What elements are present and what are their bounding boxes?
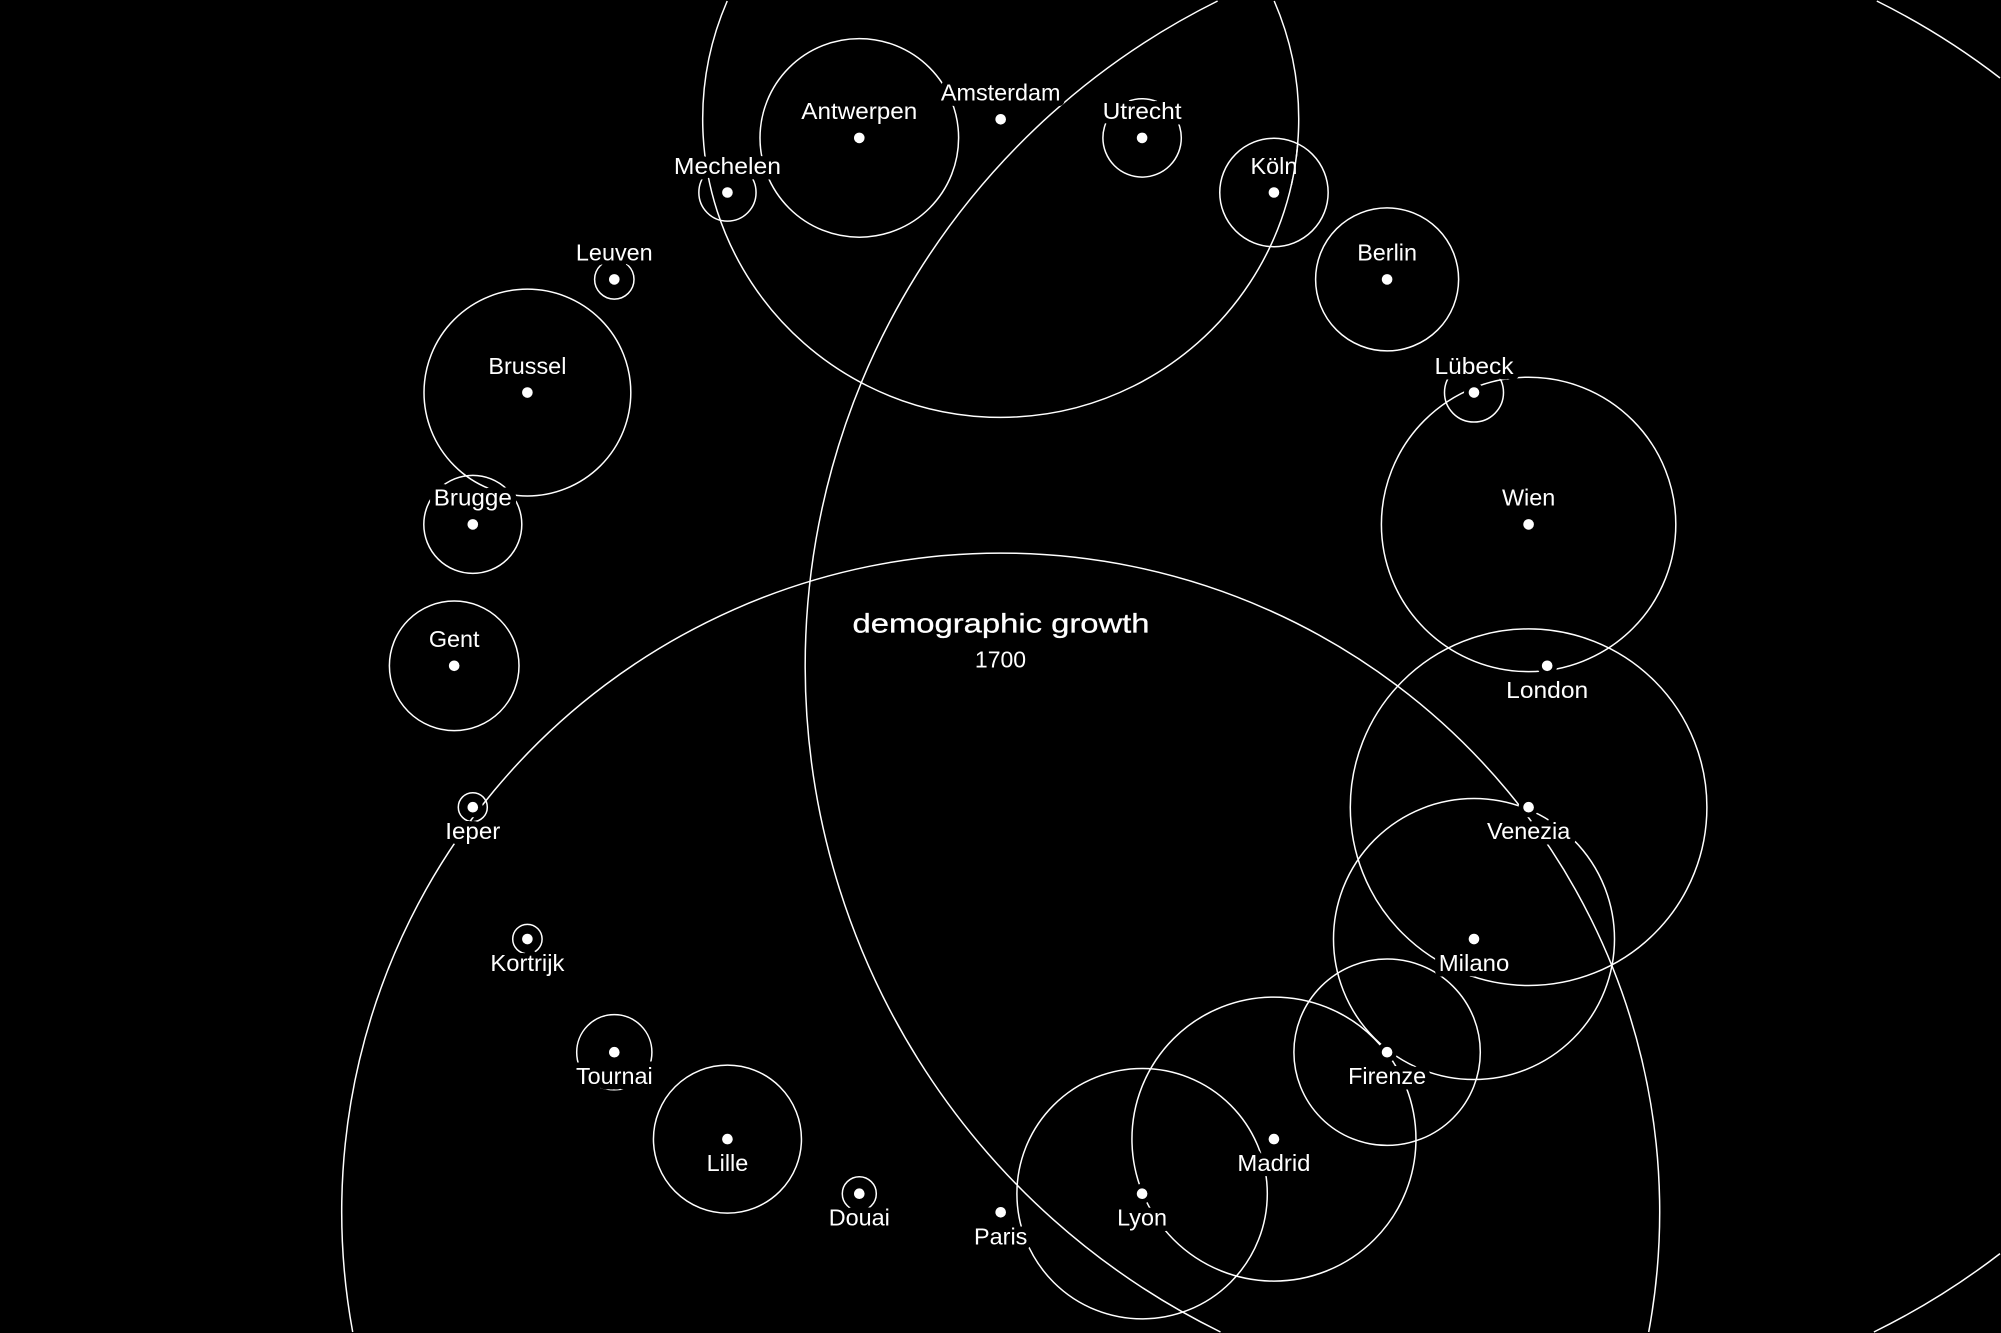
circle: Kortrijk <box>513 924 542 954</box>
circle: London <box>805 1 2000 1332</box>
city: Lyon <box>1117 1184 1167 1231</box>
city: Lübeck: Lübeck <box>1434 353 1514 379</box>
city: Antwerpen <box>801 98 917 148</box>
city: Wien: Wien <box>1502 485 1555 511</box>
city: Kortrijk: Kortrijk <box>490 950 565 976</box>
circle: Köln <box>1220 138 1328 247</box>
city: Venezia: Venezia <box>1487 818 1571 844</box>
year: 1700 <box>975 647 1026 673</box>
circle: Lyon <box>1017 1068 1267 1319</box>
circle: Douai <box>842 1177 876 1211</box>
circle: Lille <box>653 1065 801 1213</box>
city: Amsterdam: Amsterdam <box>941 80 1060 106</box>
city: Berlin <box>1357 240 1417 289</box>
city: Lyon: Lyon <box>1117 1205 1167 1231</box>
city: Ieper <box>445 797 501 844</box>
city: Brugge <box>434 484 512 534</box>
city: Madrid <box>1237 1129 1310 1176</box>
circle: Lübeck <box>1444 363 1504 422</box>
city: Köln: Köln <box>1251 153 1297 179</box>
circle: Milano <box>1334 799 1614 1080</box>
city: London: London <box>1506 677 1588 703</box>
circle: Venezia <box>1350 629 1707 986</box>
city: Paris <box>974 1202 1027 1249</box>
city: Milano <box>1439 929 1509 976</box>
title: demographic growth <box>852 608 1150 638</box>
circle: Paris <box>342 553 1660 1332</box>
city: Madrid: Madrid <box>1237 1150 1310 1176</box>
city: Lille: Lille <box>707 1150 748 1176</box>
city: Douai: Douai <box>829 1205 890 1231</box>
city: Milano: Milano <box>1439 950 1509 976</box>
city: Paris: Paris <box>974 1223 1027 1249</box>
city: Amsterdam <box>941 80 1060 129</box>
city: Firenze: Firenze <box>1348 1063 1426 1089</box>
city: Leuven <box>576 240 653 289</box>
circle: Brussel <box>424 289 631 496</box>
city: Tournai: Tournai <box>576 1063 653 1089</box>
city: Tournai <box>576 1042 653 1089</box>
city: London <box>1506 656 1588 703</box>
city: Firenze <box>1348 1042 1426 1089</box>
circle: Leuven <box>595 260 634 299</box>
circle: Gent <box>389 601 519 731</box>
city: Lübeck <box>1434 353 1514 403</box>
city: Köln <box>1251 153 1297 202</box>
city markers layer <box>429 80 1588 1249</box>
city: Gent <box>429 626 480 676</box>
circle: Antwerpen <box>760 39 959 237</box>
city: Mechelen <box>674 153 781 202</box>
circle: Amsterdam <box>703 1 1299 417</box>
city: Venezia <box>1487 797 1571 844</box>
city: Leuven: Leuven <box>576 240 653 266</box>
city: Mechelen: Mechelen <box>674 153 781 179</box>
circle: Ieper <box>458 793 487 822</box>
circle: Firenze <box>1294 959 1480 1145</box>
city: Douai <box>829 1184 890 1231</box>
city: Utrecht <box>1103 98 1182 148</box>
circle: Mechelen <box>699 164 756 221</box>
city: Gent: Gent <box>429 626 480 652</box>
city: Brugge: Brugge <box>434 484 512 510</box>
city: Brussel <box>488 353 566 403</box>
city: Wien <box>1502 485 1555 534</box>
circle: Tournai <box>577 1015 652 1090</box>
Amsterdam arc passing over the Köln label <box>1291 145 1298 185</box>
city: Lille <box>707 1129 748 1176</box>
city: Ieper: Ieper <box>445 818 501 844</box>
city: Brussel: Brussel <box>488 353 566 379</box>
circle: Utrecht <box>1103 99 1181 177</box>
city: Kortrijk <box>490 929 565 976</box>
circle: Madrid <box>1132 997 1416 1281</box>
city: Utrecht: Utrecht <box>1103 98 1182 124</box>
city: Antwerpen: Antwerpen <box>801 98 917 124</box>
circle: Brugge <box>424 475 522 573</box>
circle: Berlin <box>1316 208 1459 351</box>
city: Berlin: Berlin <box>1357 240 1417 266</box>
circle: Wien <box>1381 377 1676 672</box>
